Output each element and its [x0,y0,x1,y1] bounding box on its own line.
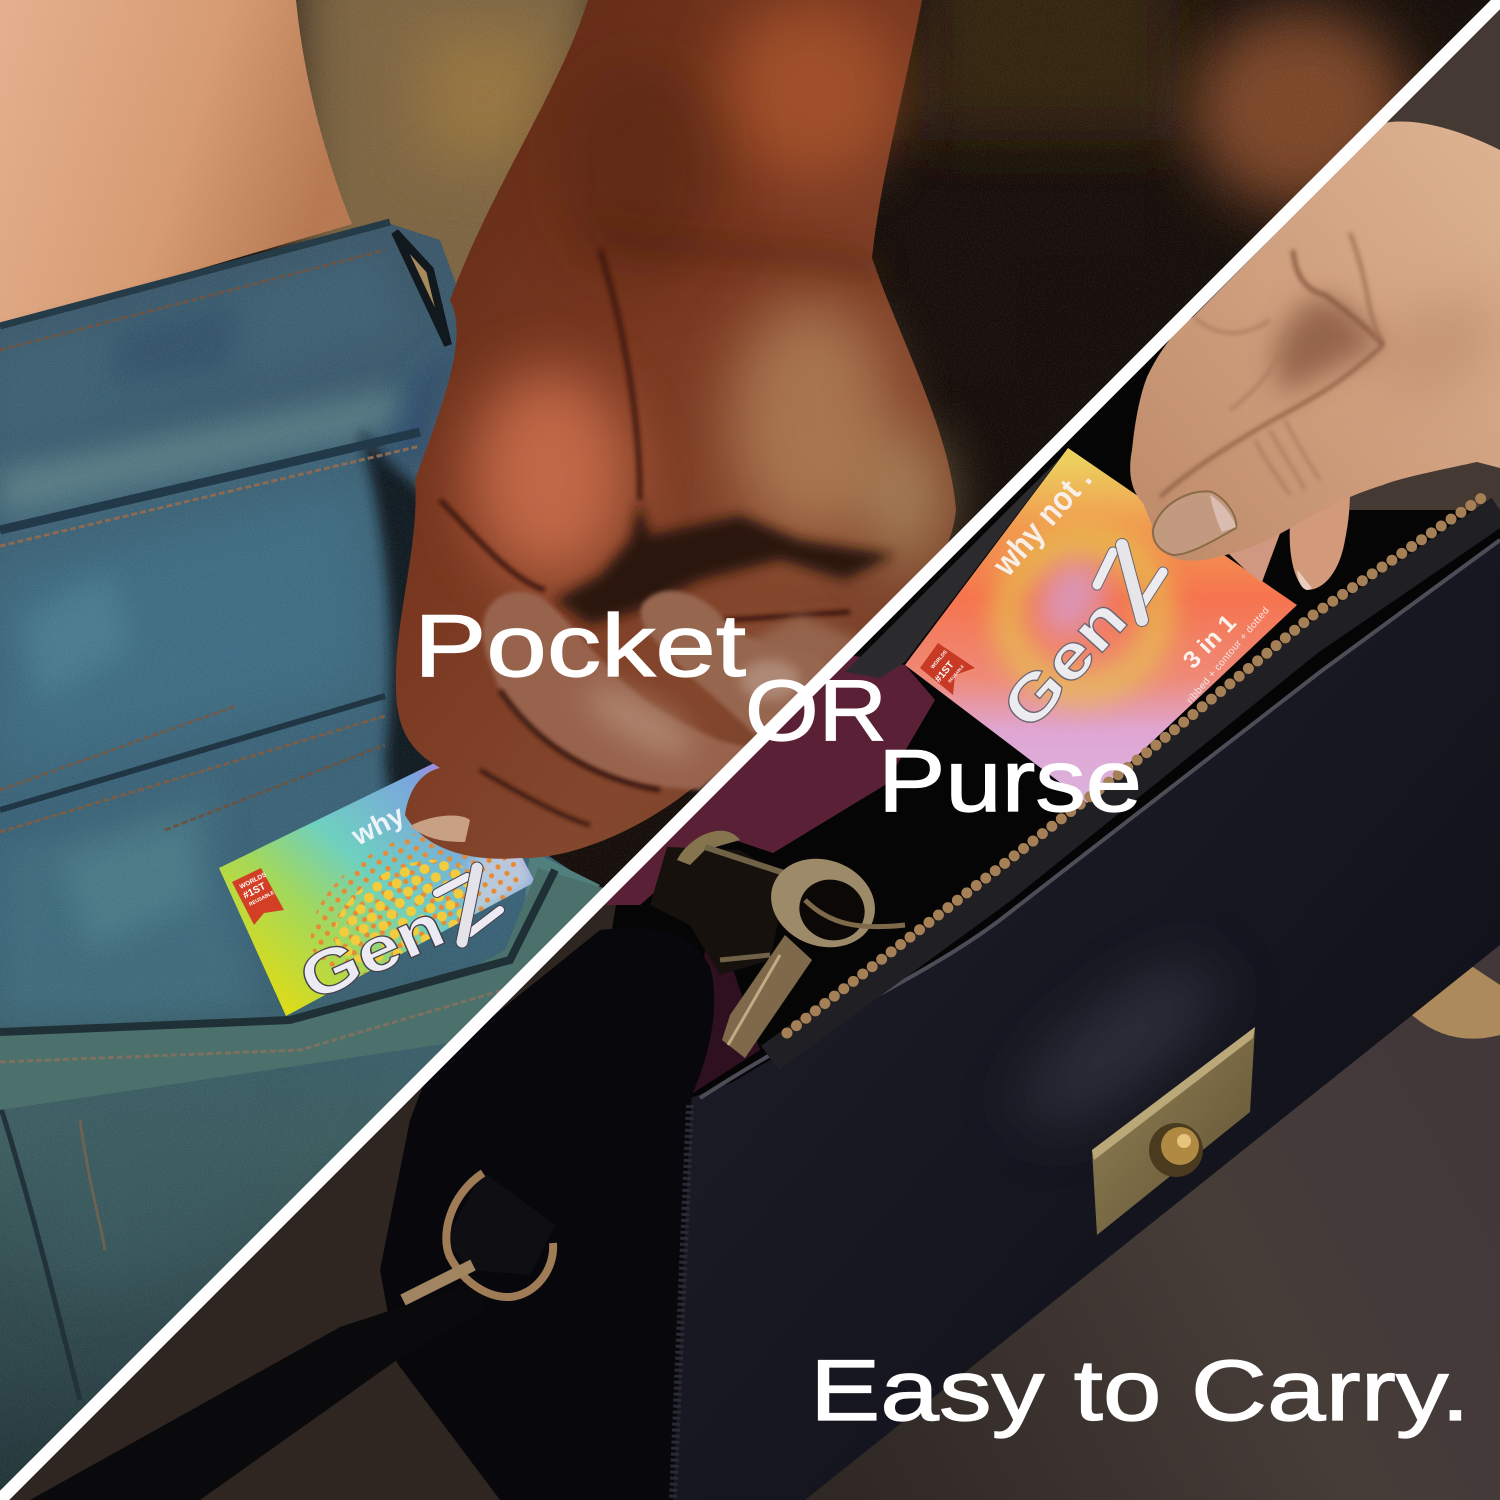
lower left tabletop [0,880,620,1500]
keys [650,831,905,1058]
lower fingers [1223,520,1285,582]
GenZ wordmark: Gen [290,891,455,1015]
middle finger pad [638,588,798,736]
ribbon badge: WORLDS [930,649,949,670]
purse front panel [672,540,1500,1500]
ribbon badge: REUSABLE [248,890,276,908]
background wall top right [1340,0,1500,510]
thumbnail [1153,491,1236,555]
crevice between palm and fingers [555,500,895,625]
woman's hand [1130,121,1500,590]
maroon lining [600,655,935,905]
purse back flap [380,928,714,1500]
seam [700,540,1500,1098]
ribbon badge: #1ST [241,881,268,902]
zipper tape [770,510,1500,1058]
leather highlight [1002,941,1238,1149]
ribbon badge: WORLDS [239,871,268,891]
blurred background [213,0,1490,888]
floor [700,900,1500,1500]
ribbon badge [920,643,975,695]
product card: GenZ rainbow [219,748,545,1016]
zipper teeth [787,497,1483,1033]
ribbon badge: REUSABLE [947,663,965,684]
brand why not: why [346,799,410,852]
label: OR: OR [745,663,887,759]
clasp [1092,1027,1255,1235]
variant text: ribbed + contour + dotted [1185,605,1272,706]
ribbon badge [232,868,284,925]
denim pocket edge over card [0,868,610,1110]
product card: GenZ coral [905,448,1297,803]
ribbon badge: #1ST [933,660,957,685]
gold purse foot [1412,965,1500,1039]
hand and thumb [1130,121,1500,561]
label: Pocket: Pocket [414,596,746,695]
thumb knuckle wrinkles [1255,420,1320,495]
upper purse rim [845,458,1060,678]
headline: Easy to Carry.: Easy to Carry. [810,1343,1470,1439]
lower palm [754,612,856,664]
lining strip by flap [690,950,760,1095]
3 in 1 text: 3 in 1 [1178,609,1242,674]
index finger pad [483,592,760,790]
thumb upper edge [1160,345,1383,497]
dark backdrop [612,280,1500,1097]
flap stitched edge [673,1105,690,1500]
zipper Z [437,868,500,942]
man's hand [396,0,956,859]
zipper Z [1097,545,1163,620]
brand why not: why not . [985,460,1099,584]
GenZ wordmark: Gen [989,585,1141,742]
thumbnail [410,815,470,842]
bare waist skin [0,0,352,328]
label: Purse: Purse [878,731,1142,830]
shadow between index and thumb [1275,300,1383,395]
strap and ring [30,1172,555,1500]
